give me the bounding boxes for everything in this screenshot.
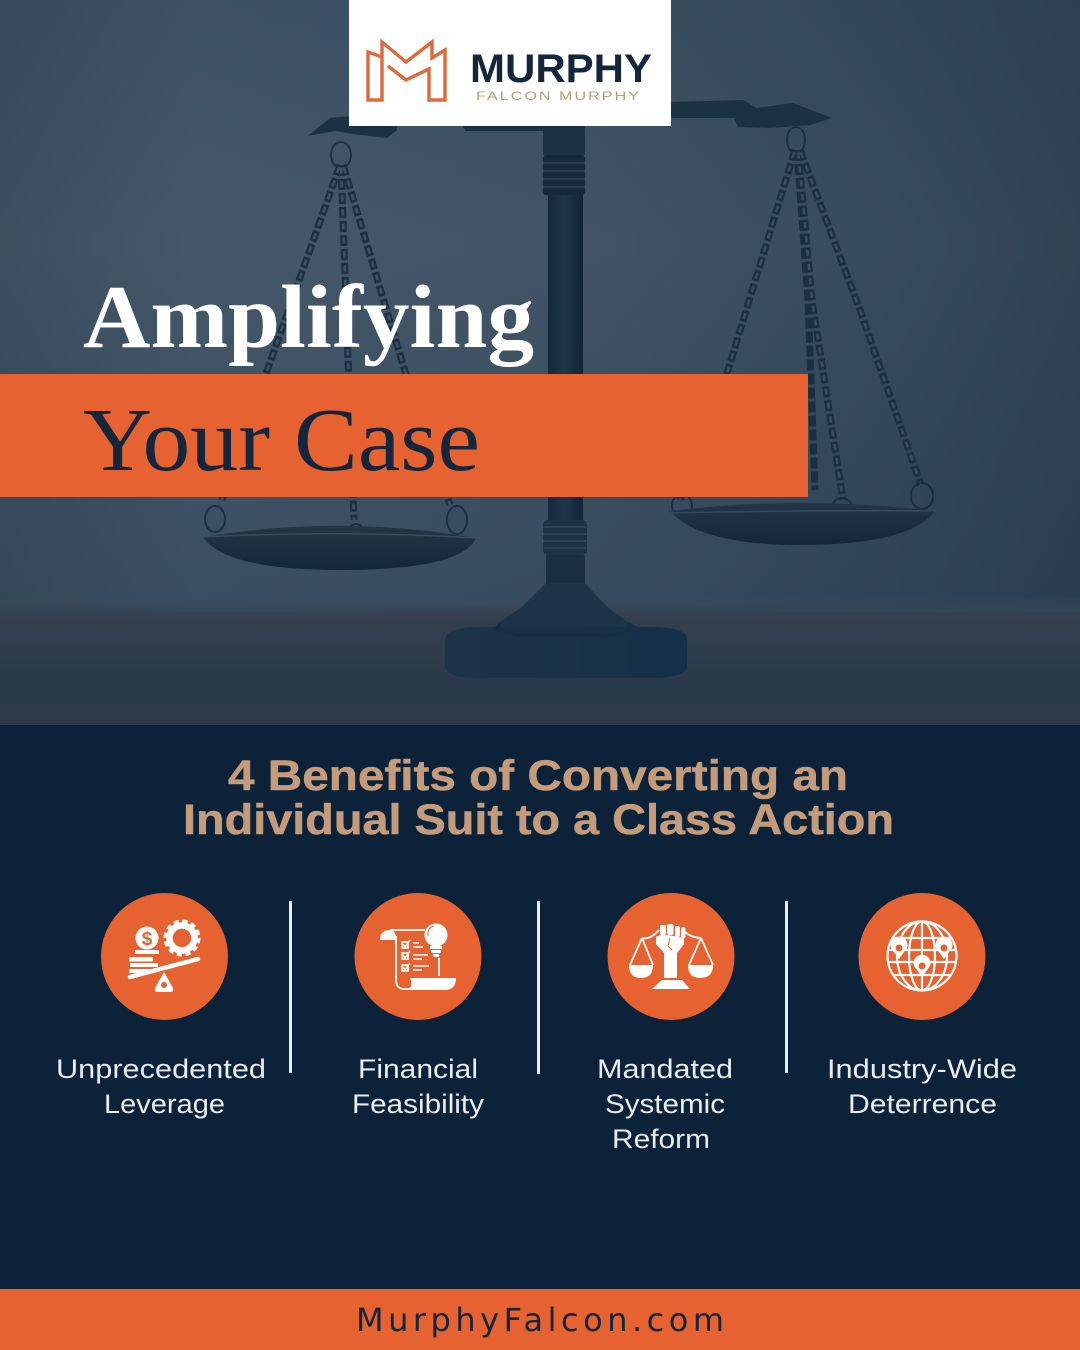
label: Deterrence (848, 1089, 997, 1119)
label (827, 1054, 1017, 1119)
icon: globe with map pins (858, 893, 986, 1020)
icon: coins and gear on seesaw: $ (142, 929, 153, 950)
website URL: MurphyFalcon.com (356, 1301, 724, 1339)
label (352, 1054, 485, 1119)
benefit 3: Mandated Systemic Reform (597, 893, 734, 1154)
background photo: scales of justice (0, 0, 1080, 725)
icon: M logo mark (368, 42, 445, 100)
subheading: Individual Suit to a Class Action (183, 796, 894, 844)
label: Feasibility (352, 1089, 485, 1119)
label: Financial (358, 1054, 478, 1084)
label: Industry-Wide (827, 1054, 1017, 1084)
benefit 2: Financial Feasibility (352, 893, 485, 1119)
label: Leverage (104, 1089, 225, 1119)
logo wordmark: MURPHY (470, 47, 652, 91)
icon: coins and gear on seesaw (101, 893, 228, 1020)
label: Unprecedented (56, 1054, 266, 1084)
lower navy panel (0, 725, 1080, 1289)
benefit 4: Industry-Wide Deterrence (827, 893, 1017, 1119)
title line 2: Your Case (83, 391, 480, 490)
benefit 1: Unprecedented Leverage (56, 893, 266, 1119)
label: Mandated (597, 1054, 733, 1084)
logo panel (349, 0, 671, 126)
icon: raised fist holding scales (608, 893, 734, 1020)
label: Reform (612, 1124, 710, 1154)
icon: scale column (445, 126, 687, 678)
label (56, 1054, 266, 1119)
icon: right chains and pan (670, 127, 935, 545)
label (597, 1054, 733, 1154)
logo tagline: FALCON MURPHY (476, 89, 641, 103)
title line 1: Amplifying (83, 268, 534, 367)
label: Systemic (605, 1089, 725, 1119)
subheading (183, 752, 894, 844)
icon: scale beam (308, 100, 832, 138)
icon: left chains and pan (203, 142, 476, 570)
subheading: 4 Benefits of Converting an (228, 752, 848, 800)
icon: checklist scroll and light bulb (354, 893, 482, 1020)
footer band (0, 1289, 1080, 1350)
title banner (0, 374, 808, 497)
